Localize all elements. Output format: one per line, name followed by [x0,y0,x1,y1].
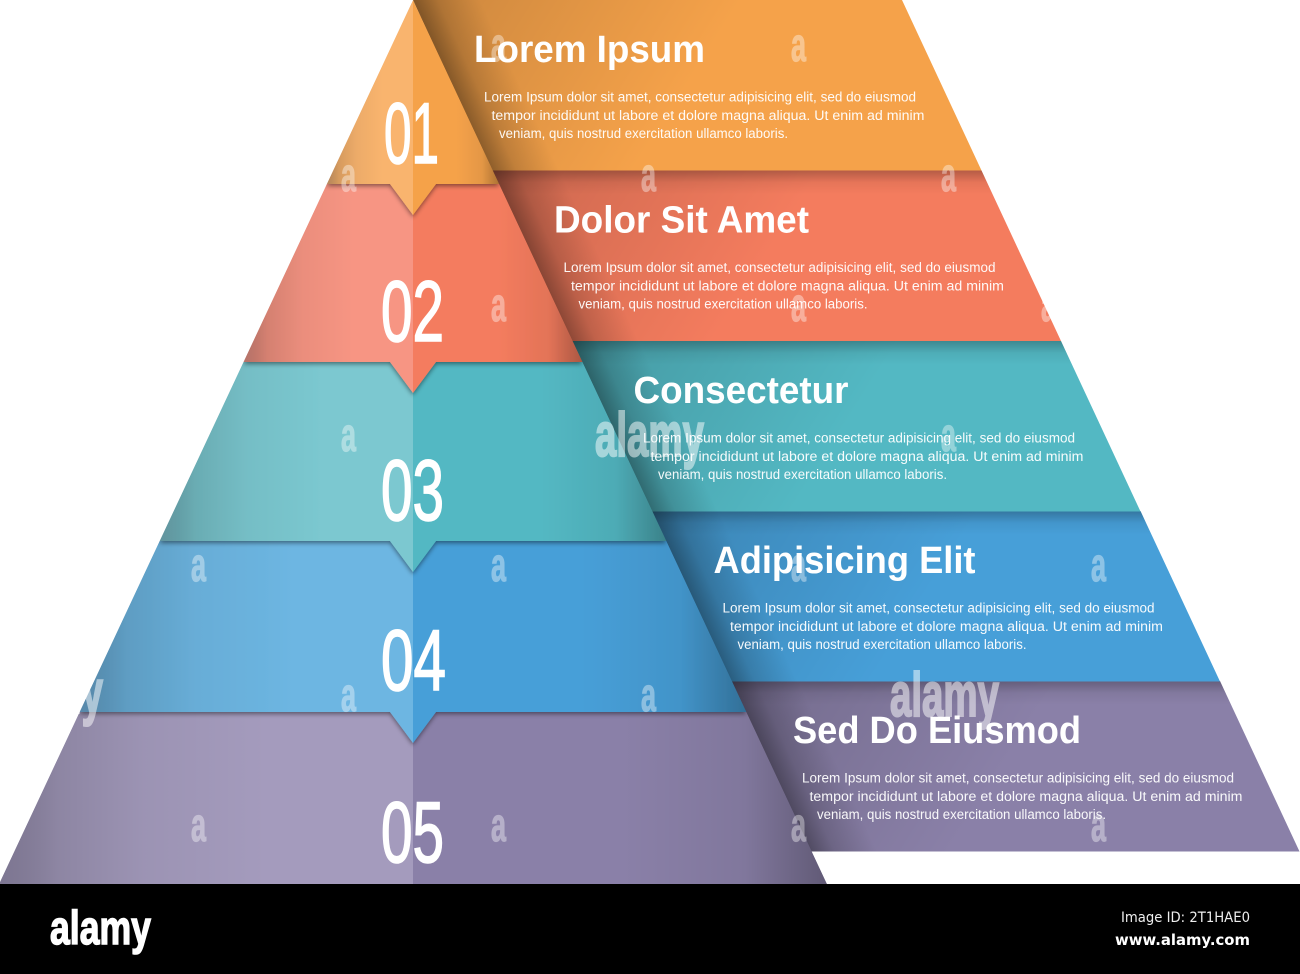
band 1: Lorem Ipsum: Lorem Ipsum [474,29,705,71]
band 5: Sed Do Eiusmod: Lorem Ipsum dolor sit amet, consectetur adipisicing elit, sed do eiusmod [802,770,1234,786]
level 01 with arrow [327,0,499,215]
level 05 [0,712,827,884]
panel: numbered pyramid [0,0,827,884]
band 2: Dolor Sit Amet: tempor incididunt ut labore et dolore magna aliqua. Ut enim ad minim [571,278,1004,294]
band 1: Lorem Ipsum: Lorem Ipsum dolor sit amet, consectetur adipisicing elit, sed do eiusmod [484,90,916,104]
stock watermarks: a [491,798,506,851]
stock watermarks [0,18,1106,851]
site url: www.alamy.com [1115,931,1250,949]
footer logo: alamy [50,901,151,954]
stock watermarks: a [491,538,506,591]
band 2: Dolor Sit Amet: Dolor Sit Amet [554,200,809,242]
stock watermarks: alamy [890,661,999,730]
band 1: Lorem Ipsum: tempor incididunt ut labore et dolore magna aliqua. Ut enim ad minim [492,108,924,123]
band 1: Lorem Ipsum [413,0,982,170]
level 04 with arrow [80,541,746,743]
footer bar [0,884,1300,974]
band 3: Consectetur: tempor incididunt ut labore et dolore magna aliqua. Ut enim ad minim [650,449,1084,464]
stock watermarks: a [1091,798,1106,851]
stock watermarks: a [791,278,806,331]
band 4: Adipisicing Elit [650,511,1220,682]
band 1: Lorem Ipsum: veniam, quis nostrud exercitation ullamco laboris. [499,126,788,141]
image id: Image ID: 2T1HAE0 [1121,910,1250,926]
band 5: Sed Do Eiusmod [730,681,1300,852]
band 4: Adipisicing Elit: tempor incididunt ut labore et dolore magna aliqua. Ut enim ad minim [730,619,1163,634]
band 5: Sed Do Eiusmod: veniam, quis nostrud exercitation ullamco laboris. [817,807,1106,822]
stock watermarks: a [341,408,356,461]
stock watermarks: a [341,148,356,201]
stock watermarks: a [941,408,956,461]
stock watermarks: a [641,668,656,721]
band 4: Adipisicing Elit: veniam, quis nostrud exercitation ullamco laboris. [738,637,1026,652]
stock watermarks: a [191,798,206,851]
band 4: Adipisicing Elit: Adipisicing Elit [714,540,976,582]
panel: text bands [413,0,1300,852]
band 3: Consectetur [571,341,1140,512]
stock watermarks: alamy [595,401,704,470]
band 3: Consectetur: veniam, quis nostrud exercitation ullamco laboris. [658,467,947,482]
stock watermarks: a [791,798,806,851]
band 2: Dolor Sit Amet [492,170,1061,341]
level 04 with arrow: 04 [381,613,446,709]
level 03 with arrow: 03 [381,443,444,539]
band 2: Dolor Sit Amet: veniam, quis nostrud exercitation ullamco laboris. [578,296,868,312]
stock watermarks: a [191,538,206,591]
band 5: Sed Do Eiusmod: Sed Do Eiusmod [793,710,1081,752]
band 3: Consectetur: Consectetur [634,370,849,412]
stock watermarks: a [641,148,656,201]
band 2: Dolor Sit Amet: Lorem Ipsum dolor sit amet, consectetur adipisicing elit, sed do eiusmod [564,260,996,275]
stock watermarks: a [341,668,356,721]
stock watermarks: a [491,18,506,71]
level 02 with arrow [244,184,582,393]
level 05: 05 [381,785,444,881]
band 5: Sed Do Eiusmod: tempor incididunt ut labore et dolore magna aliqua. Ut enim ad minim [810,789,1242,804]
stock watermarks: a [791,18,806,71]
stock watermarks: a [1091,538,1106,591]
stock watermarks: a [791,538,806,591]
level 02 with arrow: 02 [381,264,444,360]
level 03 with arrow [160,362,666,572]
stock watermarks: a [1041,278,1056,331]
level 01 with arrow: 01 [384,86,439,182]
band 3: Consectetur: Lorem Ipsum dolor sit amet, consectetur adipisicing elit, sed do eiusmod [643,430,1075,446]
band 4: Adipisicing Elit: Lorem Ipsum dolor sit amet, consectetur adipisicing elit, sed do eiusmod [722,600,1154,616]
stock watermarks: a [491,278,506,331]
stock watermarks: a [941,148,956,201]
